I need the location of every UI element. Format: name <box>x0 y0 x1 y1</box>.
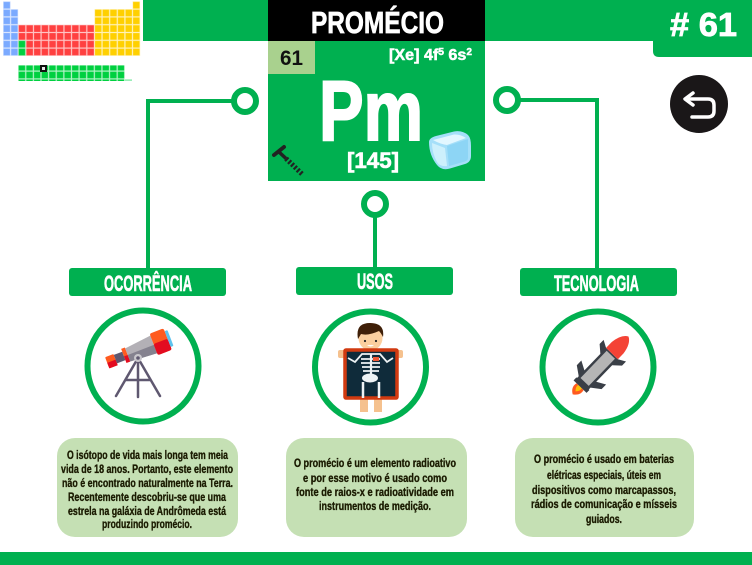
text block: tecnologia: O promécio é usado em baterias <box>534 452 674 466</box>
heading: ocorrência: OCORRÊNCIA <box>104 271 192 296</box>
text block: tecnologia: dispositivos como marcapassos, <box>532 483 676 497</box>
text block: ocorrência: produzindo promécio. <box>102 517 192 531</box>
hands <box>338 350 345 358</box>
element symbol: Pm <box>319 64 423 159</box>
atomic mass: [145] <box>347 148 399 173</box>
icon: rocket <box>542 312 654 422</box>
text block: usos <box>286 438 467 537</box>
text block: ocorrência: Recentemente descobriu-se que uma <box>68 490 226 504</box>
electron configuration: 2 <box>466 47 472 58</box>
text block: ocorrência <box>57 438 238 537</box>
footer bar <box>0 552 752 565</box>
electron configuration: 5 <box>438 47 444 58</box>
icon: back button <box>670 75 728 133</box>
legs <box>360 398 368 412</box>
title: PROMÉCIO <box>311 5 444 40</box>
head <box>358 323 383 350</box>
text block: ocorrência: O isótopo de vida mais longa tem meia <box>67 448 228 462</box>
badge: element number <box>653 0 752 57</box>
electron configuration: 6s <box>444 47 466 64</box>
atomic number: 61 <box>280 47 303 70</box>
icon: x-ray <box>315 312 426 422</box>
text block: usos: instrumentos de medição. <box>319 499 431 513</box>
heading: tecnologia: TECNOLOGIA <box>554 271 639 296</box>
heading: tecnologia <box>520 268 677 296</box>
text block: usos: e por esse motivo é usado como <box>303 471 447 485</box>
panel: element card <box>268 41 485 181</box>
text block: ocorrência: não é encontrado naturalmente na Terra. <box>62 476 233 490</box>
text block: ocorrência: estrela na galáxia de Andrômeda está <box>68 504 226 518</box>
connector: tecnologia <box>496 89 597 270</box>
mini periodic table <box>3 1 140 81</box>
icon: telescope <box>88 310 198 422</box>
connector: ocorrência <box>148 90 256 270</box>
title <box>268 0 485 41</box>
x-ray plate <box>345 350 397 398</box>
heading: usos: USOS <box>357 269 393 294</box>
heading: ocorrência <box>69 268 226 296</box>
text block: tecnologia <box>515 438 694 537</box>
badge: element number: # 61 <box>670 6 737 43</box>
icon: ice cube <box>429 131 471 169</box>
electron configuration: [Xe] 4f <box>389 47 438 64</box>
heading: usos <box>296 267 453 295</box>
icon: screw <box>274 147 303 175</box>
text block: tecnologia: elétricas especiais, úteis em <box>547 468 661 482</box>
text block: ocorrência: vida de 18 anos. Portanto, este elemento <box>61 462 233 476</box>
atomic number <box>268 41 315 74</box>
skeleton <box>348 354 393 398</box>
text block: tecnologia: rádios de comunicação e mísseis <box>531 497 677 511</box>
connector: usos <box>364 193 386 269</box>
text block: tecnologia: guiados. <box>586 512 622 526</box>
text block: usos: O promécio é um elemento radioativo <box>294 456 456 470</box>
text block: usos: fonte de raios-x e radioatividade em <box>296 485 454 499</box>
top green banner <box>143 0 665 41</box>
